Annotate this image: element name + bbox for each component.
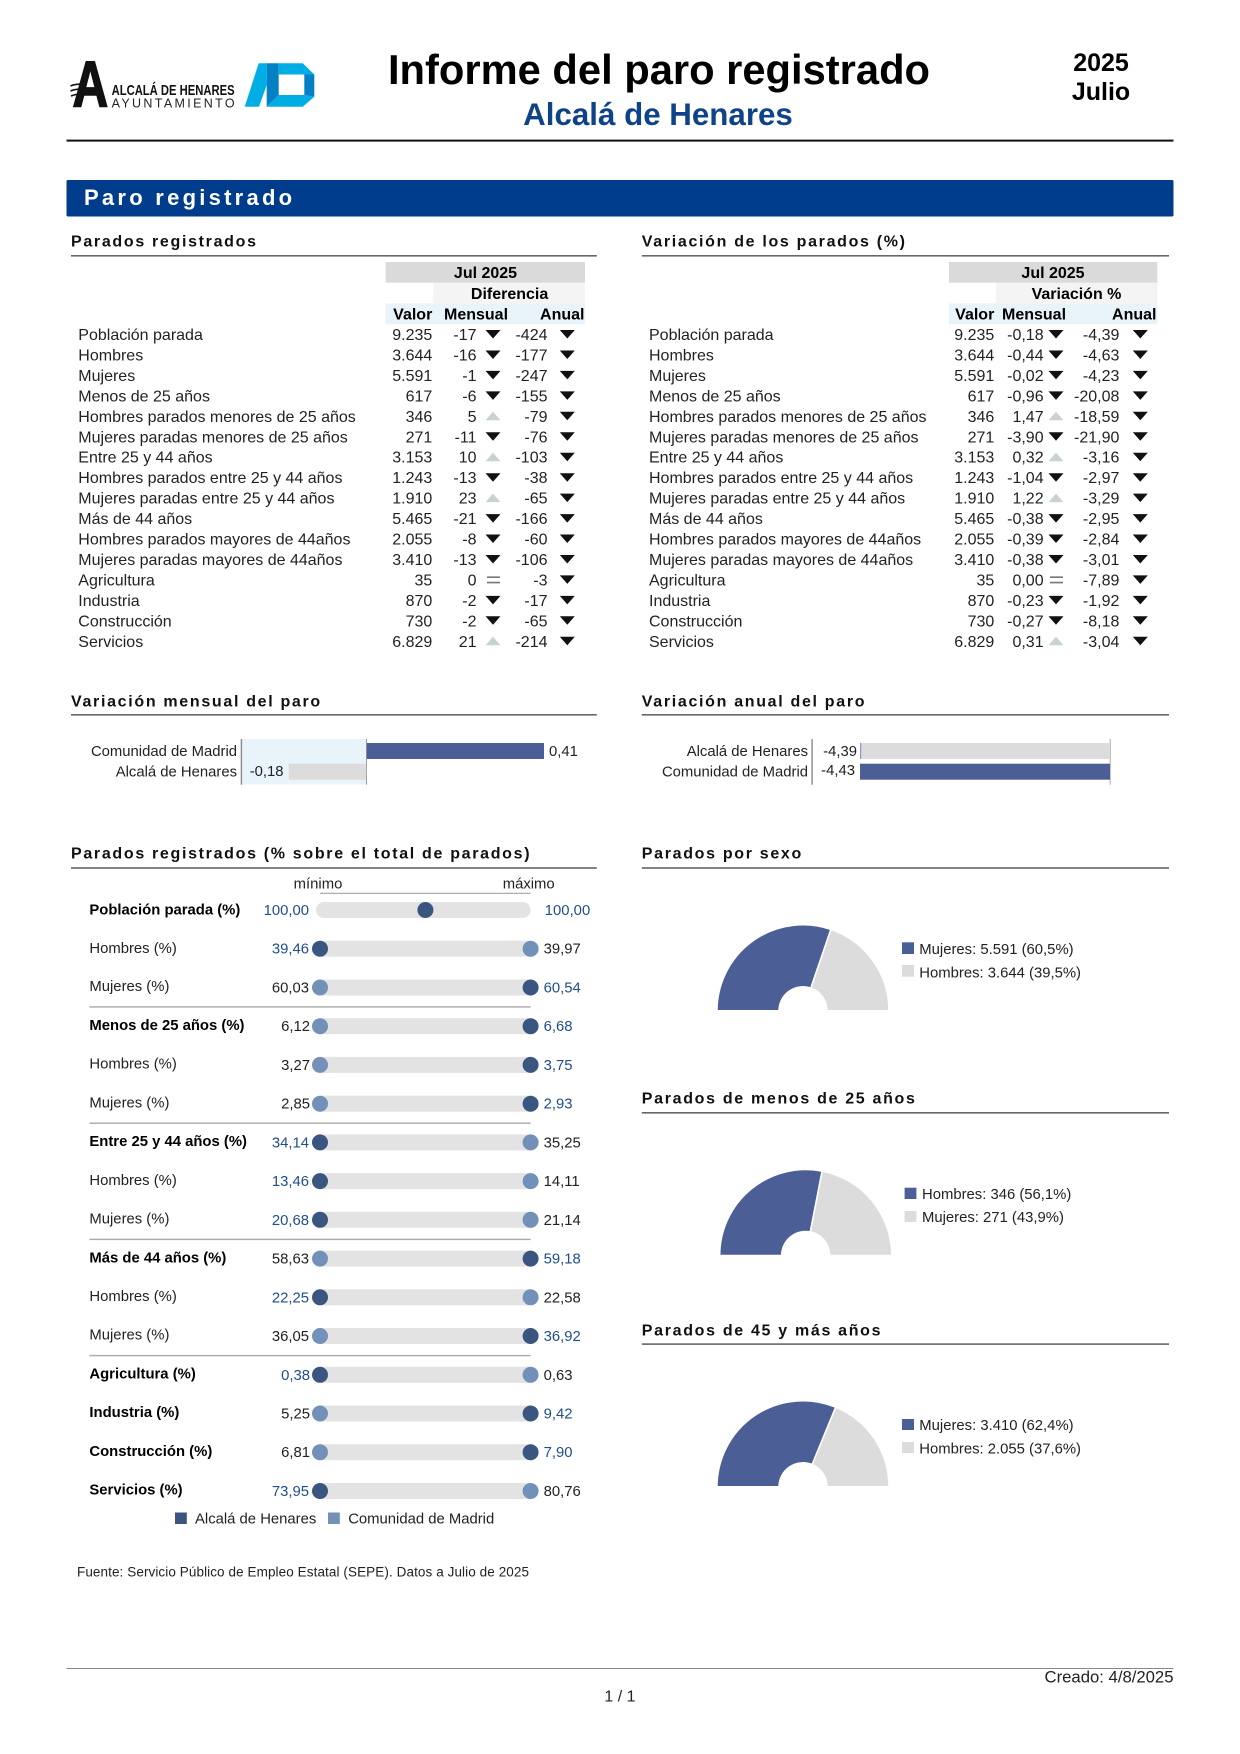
legend: Hombres: 3.644 (39,5%) xyxy=(919,965,1081,981)
logo: Alcalá de Henares Ayuntamiento: AYUNTAMIENTO xyxy=(112,96,235,110)
row: Industria: -1,92 xyxy=(1083,593,1120,610)
row: Hombres parados mayores de 44años: -2,84 xyxy=(1083,532,1120,548)
range row: Construcción (%): 7,90 xyxy=(544,1445,572,1461)
range row: Población parada (%): Población parada (%) xyxy=(89,902,240,918)
row: Industria: -0,23 xyxy=(1007,593,1044,610)
range row: Industria (%): 5,25 xyxy=(281,1406,310,1422)
range row: Servicios (%): Servicios (%) xyxy=(89,1483,183,1499)
bar chart: monthly variation: -0,18 xyxy=(250,764,284,780)
panel: Parados de menos de 25 años xyxy=(642,1091,1169,1256)
bar chart: monthly variation: 0,41 xyxy=(549,744,578,760)
row: Población parada xyxy=(649,327,1148,344)
row: Industria xyxy=(649,593,1148,610)
row: Mujeres paradas entre 25 y 44 años: 23 xyxy=(459,491,477,508)
row: Mujeres xyxy=(78,368,575,385)
row: Mujeres: -4,23 xyxy=(1083,368,1120,385)
legend: Hombres: 346 (56,1%) xyxy=(922,1187,1071,1203)
logo: Alcalá de Henares Ayuntamiento xyxy=(70,49,314,121)
range row: Mujeres (%): 60,54 xyxy=(544,980,581,996)
row: Hombres parados mayores de 44años: Hombres parados mayores de 44años xyxy=(78,532,350,548)
range row: Mujeres (%): 36,05 xyxy=(272,1329,309,1345)
table header xyxy=(386,262,585,324)
range column headers xyxy=(294,876,555,894)
row: Hombres xyxy=(649,348,1148,364)
row: Más de 44 años: Más de 44 años xyxy=(649,511,763,528)
row: Construcción: -0,27 xyxy=(1007,613,1044,630)
row: Servicios: Servicios xyxy=(78,634,143,651)
row: Entre 25 y 44 años xyxy=(649,450,1148,467)
row: Mujeres paradas entre 25 y 44 años: 1,22 xyxy=(1012,491,1044,508)
row: Hombres parados menores de 25 años: 5 xyxy=(468,409,477,426)
row: Hombres parados entre 25 y 44 años xyxy=(78,470,575,487)
range row: Mujeres (%): 20,68 xyxy=(272,1213,309,1229)
row: Menos de 25 años: -20,08 xyxy=(1074,388,1119,405)
created date: Creado: 4/8/2025 xyxy=(1045,1668,1174,1687)
row: Construcción xyxy=(78,613,575,630)
row: Mujeres paradas menores de 25 años: -76 xyxy=(524,429,548,446)
row: Construcción: 730 xyxy=(968,613,994,630)
range row: Más de 44 años (%): Más de 44 años (%) xyxy=(89,1250,226,1266)
title: Informe del paro registrado xyxy=(388,46,930,93)
row: Mujeres paradas entre 25 y 44 años: Mujeres paradas entre 25 y 44 años xyxy=(649,491,905,508)
range column headers: mínimo xyxy=(294,876,342,892)
row: Servicios: 6.829 xyxy=(392,634,432,651)
row: Hombres parados menores de 25 años: 346 xyxy=(968,409,994,426)
row: Entre 25 y 44 años: 3.153 xyxy=(392,450,432,467)
legend: Hombres: 2.055 (37,6%) xyxy=(919,1441,1081,1457)
section banner: Paro registrado: Paro registrado xyxy=(84,185,295,210)
row: Servicios: -214 xyxy=(515,634,548,651)
row: Mujeres paradas menores de 25 años: -3,90 xyxy=(1007,429,1044,446)
row: Población parada: -4,39 xyxy=(1083,327,1120,344)
row: Industria xyxy=(78,593,575,610)
range row: Mujeres (%): Mujeres (%) xyxy=(89,1212,169,1228)
table header: Variación % xyxy=(1032,286,1121,303)
row: Hombres: -0,44 xyxy=(1007,348,1044,364)
row: Hombres parados entre 25 y 44 años: -13 xyxy=(453,470,477,487)
row: Más de 44 años: 5.465 xyxy=(954,511,994,528)
row: Mujeres paradas mayores de 44años xyxy=(78,552,575,569)
row: Industria: -17 xyxy=(524,593,548,610)
logo: Alcalá de Henares Ayuntamiento: ALCALÁ DE HENARES xyxy=(112,82,235,99)
row: Más de 44 años xyxy=(649,511,1148,528)
range row: Entre 25 y 44 años (%): 34,14 xyxy=(272,1135,309,1151)
bar chart: annual variation xyxy=(662,739,1111,785)
range row: Hombres (%): Hombres (%) xyxy=(89,1173,177,1189)
range row: Entre 25 y 44 años (%): 35,25 xyxy=(544,1135,581,1151)
heading: Parados de 45 y más años xyxy=(642,1322,882,1339)
range row: Población parada (%) xyxy=(89,902,590,919)
range row: Mujeres (%): Mujeres (%) xyxy=(89,1328,169,1344)
row: Entre 25 y 44 años: 0,32 xyxy=(1012,450,1044,467)
row: Hombres parados mayores de 44años xyxy=(78,532,575,548)
range row: Menos de 25 años (%): Menos de 25 años (%) xyxy=(89,1018,245,1034)
row: Menos de 25 años: -155 xyxy=(515,388,548,405)
row: Hombres parados menores de 25 años: -18,59 xyxy=(1074,409,1119,426)
legend: Comunidad de Madrid xyxy=(348,1512,494,1528)
bar chart: monthly variation: Alcalá de Henares xyxy=(116,765,237,781)
table header: Anual xyxy=(540,306,584,324)
row: Servicios xyxy=(78,634,575,651)
row: Servicios: 21 xyxy=(459,634,477,651)
range column headers: máximo xyxy=(503,876,555,892)
range row: Entre 25 y 44 años (%) xyxy=(89,1134,581,1151)
semi-donut chart xyxy=(720,1170,892,1256)
row: Hombres parados menores de 25 años: Hombres parados menores de 25 años xyxy=(78,409,356,426)
range row: Hombres (%): 22,58 xyxy=(544,1290,581,1306)
range row: Menos de 25 años (%): 6,68 xyxy=(544,1019,572,1035)
row: Mujeres xyxy=(649,368,1148,385)
row: Industria: -2 xyxy=(462,593,477,610)
row: Construcción xyxy=(649,613,1148,630)
logo: Alcalá de Henares Ayuntamiento: A xyxy=(72,49,108,121)
row: Población parada: -0,18 xyxy=(1007,327,1044,344)
table header xyxy=(949,262,1157,324)
row: Población parada: 9.235 xyxy=(954,327,994,344)
row: Entre 25 y 44 años: Entre 25 y 44 años xyxy=(649,450,783,467)
row: Hombres parados menores de 25 años xyxy=(78,409,575,426)
range row: Hombres (%): Hombres (%) xyxy=(89,1057,177,1073)
row: Hombres parados mayores de 44años: Hombres parados mayores de 44años xyxy=(649,532,921,548)
range row: Población parada (%): 100,00 xyxy=(545,903,590,919)
range row: Hombres (%) xyxy=(89,941,581,958)
row: Menos de 25 años xyxy=(649,388,1148,405)
semi-donut chart xyxy=(717,925,889,1011)
table header: Anual xyxy=(1112,306,1156,324)
range row: Servicios (%) xyxy=(89,1483,581,1500)
row: Mujeres paradas mayores de 44años: -3,01 xyxy=(1083,552,1120,569)
legend xyxy=(175,1512,494,1528)
row: Construcción: -65 xyxy=(524,613,548,630)
row: Población parada: 9.235 xyxy=(392,327,432,344)
row: Entre 25 y 44 años: -103 xyxy=(515,450,548,467)
row: Hombres parados mayores de 44años: 2.055 xyxy=(954,532,994,548)
row: Hombres: 3.644 xyxy=(954,348,994,364)
row: Hombres parados menores de 25 años: -79 xyxy=(524,409,548,426)
row: Mujeres paradas mayores de 44años xyxy=(649,552,1148,569)
row: Más de 44 años: -2,95 xyxy=(1083,511,1120,528)
range row: Mujeres (%): 2,85 xyxy=(281,1097,310,1113)
row: Construcción: Construcción xyxy=(78,613,172,630)
footer xyxy=(66,1668,1174,1706)
row: Servicios: Servicios xyxy=(649,634,714,651)
row: Mujeres paradas menores de 25 años: Mujeres paradas menores de 25 años xyxy=(78,429,348,446)
range row: Hombres (%) xyxy=(89,1057,572,1074)
row: Mujeres paradas mayores de 44años: Mujeres paradas mayores de 44años xyxy=(649,552,913,569)
row: Servicios xyxy=(649,634,1148,651)
row: Población parada: Población parada xyxy=(649,327,774,344)
legend xyxy=(902,1418,1081,1457)
row: Hombres parados mayores de 44años: -0,39 xyxy=(1007,532,1044,548)
panel: Parados por sexo xyxy=(642,846,1169,1011)
row: Hombres: -177 xyxy=(515,348,548,364)
heading: Variación mensual del paro xyxy=(71,694,322,711)
range row: Mujeres (%) xyxy=(89,1095,572,1113)
row: Mujeres paradas menores de 25 años: 271 xyxy=(968,429,994,446)
row: Menos de 25 años: Menos de 25 años xyxy=(649,388,781,405)
legend xyxy=(902,942,1081,981)
range row: Hombres (%) xyxy=(89,1289,581,1306)
range row: Hombres (%): Hombres (%) xyxy=(89,941,177,957)
row: Agricultura: 35 xyxy=(977,572,994,589)
row: Mujeres paradas entre 25 y 44 años: -65 xyxy=(524,491,548,508)
row: Agricultura xyxy=(78,572,575,589)
row: Población parada: -424 xyxy=(515,327,548,344)
row: Entre 25 y 44 años: 3.153 xyxy=(954,450,994,467)
row: Hombres parados mayores de 44años: -60 xyxy=(524,532,548,548)
row: Hombres parados mayores de 44años: -8 xyxy=(462,532,477,548)
range row: Servicios (%): 73,95 xyxy=(272,1484,309,1500)
range row: Hombres (%): 22,25 xyxy=(272,1290,309,1306)
range row: Agricultura (%): 0,38 xyxy=(281,1368,310,1384)
legend: Mujeres: 5.591 (60,5%) xyxy=(919,942,1074,958)
range row: Hombres (%): 14,11 xyxy=(544,1174,580,1190)
range row: Hombres (%): Hombres (%) xyxy=(89,1289,177,1305)
legend xyxy=(905,1187,1071,1226)
row: Hombres parados mayores de 44años xyxy=(649,532,1148,548)
row: Mujeres paradas mayores de 44años: -106 xyxy=(515,552,548,569)
row: Entre 25 y 44 años: 10 xyxy=(459,450,477,467)
range row: Agricultura (%): 0,63 xyxy=(544,1368,572,1384)
row: Población parada: Población parada xyxy=(78,327,203,344)
row: Hombres: Hombres xyxy=(649,348,714,364)
panel: Variación de los parados table xyxy=(642,234,1169,651)
range row: Mujeres (%): Mujeres (%) xyxy=(89,979,169,995)
row: Más de 44 años: -166 xyxy=(515,511,548,528)
panel: Variación mensual del paro xyxy=(71,694,597,785)
range row: Menos de 25 años (%) xyxy=(89,1018,572,1035)
range row: Mujeres (%): 60,03 xyxy=(272,980,309,996)
range row: Más de 44 años (%) xyxy=(89,1250,581,1268)
row: Agricultura: -3 xyxy=(533,572,548,589)
row: Entre 25 y 44 años xyxy=(78,450,575,467)
row: Construcción: -8,18 xyxy=(1083,613,1120,630)
table header: Valor xyxy=(393,306,432,324)
heading: Variación de los parados (%) xyxy=(642,234,907,251)
row: Mujeres paradas menores de 25 años xyxy=(649,429,1148,446)
bar chart: annual variation: Comunidad de Madrid xyxy=(662,765,808,781)
subtitle: Alcalá de Henares xyxy=(523,97,793,132)
panel: Parados de 45 y más años xyxy=(642,1322,1169,1487)
row: Hombres parados menores de 25 años: 1,47 xyxy=(1012,409,1044,426)
row: Servicios: -3,04 xyxy=(1083,634,1120,651)
range row: Mujeres (%) xyxy=(89,1212,581,1229)
range row: Mujeres (%): Mujeres (%) xyxy=(89,1095,169,1111)
range row: Agricultura (%) xyxy=(89,1366,572,1384)
range row: Mujeres (%): 36,92 xyxy=(544,1329,581,1345)
table header: Jul 2025 xyxy=(1021,265,1085,282)
row: Más de 44 años: Más de 44 años xyxy=(78,511,192,528)
range row: Industria (%): 9,42 xyxy=(544,1406,572,1422)
range row: Hombres (%): 39,46 xyxy=(272,942,309,958)
range row: Población parada (%): 100,00 xyxy=(264,903,309,919)
row: Mujeres: -0,02 xyxy=(1007,368,1044,385)
row: Mujeres paradas entre 25 y 44 años: 1.910 xyxy=(954,491,994,508)
source note: Fuente: Servicio Público de Empleo Estatal (SEPE). Datos a Julio de 2025 xyxy=(77,1564,529,1579)
range row: Más de 44 años (%): 58,63 xyxy=(272,1252,309,1268)
range row: Industria (%): Industria (%) xyxy=(89,1405,179,1421)
row: Mujeres paradas menores de 25 años: -11 xyxy=(455,429,477,446)
row: Construcción: Construcción xyxy=(649,613,742,630)
row: Hombres: Hombres xyxy=(78,348,143,364)
row: Más de 44 años xyxy=(78,511,575,528)
range row: Entre 25 y 44 años (%): Entre 25 y 44 años (%) xyxy=(89,1134,247,1150)
row: Hombres parados entre 25 y 44 años xyxy=(649,470,1148,487)
bar chart: annual variation: -4,39 xyxy=(823,744,857,760)
row: Menos de 25 años: -6 xyxy=(462,388,477,405)
row: Mujeres paradas menores de 25 años xyxy=(78,429,575,446)
row: Hombres parados menores de 25 años: 346 xyxy=(406,409,432,426)
range row: Construcción (%): 6,81 xyxy=(281,1445,310,1461)
range row: Construcción (%): Construcción (%) xyxy=(89,1444,212,1460)
heading: Variación anual del paro xyxy=(642,694,866,711)
header xyxy=(66,46,1174,142)
row: Hombres parados entre 25 y 44 años: -38 xyxy=(524,470,548,487)
row: Hombres parados menores de 25 años: Hombres parados menores de 25 años xyxy=(649,409,926,426)
range row: Mujeres (%): 2,93 xyxy=(544,1097,572,1113)
row: Mujeres: 5.591 xyxy=(954,368,994,385)
row: Hombres parados entre 25 y 44 años: 1.243 xyxy=(392,470,432,487)
row: Más de 44 años: -0,38 xyxy=(1007,511,1044,528)
row: Hombres parados entre 25 y 44 años: -1,04 xyxy=(1007,470,1044,487)
row: Agricultura: -7,89 xyxy=(1083,572,1120,589)
row: Hombres: -4,63 xyxy=(1083,348,1120,364)
row: Hombres parados entre 25 y 44 años: -2,97 xyxy=(1083,470,1120,487)
row: Menos de 25 años xyxy=(78,388,575,405)
row: Agricultura xyxy=(649,572,1148,589)
range row: Agricultura (%): Agricultura (%) xyxy=(89,1367,196,1383)
page number: 1 / 1 xyxy=(604,1689,636,1706)
range row: Hombres (%): 13,46 xyxy=(272,1174,309,1190)
row: Hombres parados entre 25 y 44 años: 1.243 xyxy=(954,470,994,487)
row: Más de 44 años: -21 xyxy=(453,511,477,528)
row: Menos de 25 años: 617 xyxy=(406,388,432,405)
row: Industria: Industria xyxy=(78,593,140,610)
table header: Mensual xyxy=(444,306,508,324)
bar chart: monthly variation: Comunidad de Madrid xyxy=(91,744,237,760)
row: Mujeres paradas menores de 25 años: -21,90 xyxy=(1074,429,1119,446)
range row: Menos de 25 años (%): 6,12 xyxy=(281,1019,310,1035)
heading: Parados registrados xyxy=(71,234,258,251)
section banner: Paro registrado xyxy=(66,180,1174,216)
row: Mujeres paradas entre 25 y 44 años: Mujeres paradas entre 25 y 44 años xyxy=(78,491,334,508)
table header: Jul 2025 xyxy=(454,265,517,282)
row: Más de 44 años: 5.465 xyxy=(392,511,432,528)
range row: Mujeres (%): 21,14 xyxy=(544,1213,581,1229)
range row: Construcción (%) xyxy=(89,1444,572,1461)
heading: Parados por sexo xyxy=(642,846,803,863)
row: Hombres parados menores de 25 años xyxy=(649,409,1148,426)
row: Mujeres paradas mayores de 44años: -13 xyxy=(453,552,477,569)
range row: Servicios (%): 80,76 xyxy=(544,1484,581,1500)
row: Construcción: 730 xyxy=(406,613,432,630)
month: Julio xyxy=(1072,78,1130,106)
range row: Más de 44 años (%): 59,18 xyxy=(544,1252,581,1268)
row: Mujeres paradas entre 25 y 44 años xyxy=(649,491,1148,508)
row: Mujeres paradas mayores de 44años: Mujeres paradas mayores de 44años xyxy=(78,552,342,569)
row: Agricultura: 35 xyxy=(415,572,432,589)
table header: Valor xyxy=(955,306,994,324)
row: Servicios: 6.829 xyxy=(954,634,994,651)
row: Menos de 25 años: -0,96 xyxy=(1007,388,1044,405)
heading: Parados de menos de 25 años xyxy=(642,1091,917,1108)
row: Industria: 870 xyxy=(968,593,994,610)
row: Mujeres paradas entre 25 y 44 años xyxy=(78,491,575,508)
legend: Alcalá de Henares xyxy=(195,1512,316,1528)
range row: Hombres (%): 3,27 xyxy=(281,1058,310,1074)
row: Hombres parados entre 25 y 44 años: Hombres parados entre 25 y 44 años xyxy=(78,470,342,487)
range row: Industria (%) xyxy=(89,1405,572,1422)
row: Mujeres paradas menores de 25 años: 271 xyxy=(406,429,432,446)
row: Mujeres paradas menores de 25 años: Mujeres paradas menores de 25 años xyxy=(649,429,918,446)
row: Mujeres paradas mayores de 44años: 3.410 xyxy=(954,552,994,569)
row: Mujeres paradas mayores de 44años: 3.410 xyxy=(392,552,432,569)
row: Hombres parados entre 25 y 44 años: Hombres parados entre 25 y 44 años xyxy=(649,470,913,487)
range row: Mujeres (%) xyxy=(89,979,581,996)
row: Hombres xyxy=(78,348,575,364)
row: Menos de 25 años: Menos de 25 años xyxy=(78,388,210,405)
row: Población parada: -17 xyxy=(453,327,477,344)
row: Construcción: -2 xyxy=(462,613,477,630)
row: Entre 25 y 44 años: -3,16 xyxy=(1083,450,1120,467)
range row: Hombres (%): 3,75 xyxy=(544,1058,572,1074)
heading: Parados registrados (% sobre el total de parados) xyxy=(71,846,531,863)
range row: Hombres (%) xyxy=(89,1173,580,1190)
bar chart: monthly variation xyxy=(91,739,578,785)
row: Agricultura: 0,00 xyxy=(1012,572,1044,589)
row: Industria: 870 xyxy=(406,593,432,610)
row: Entre 25 y 44 años: Entre 25 y 44 años xyxy=(78,450,213,467)
table header: Mensual xyxy=(1002,306,1066,324)
row: Mujeres paradas entre 25 y 44 años: 1.910 xyxy=(392,491,432,508)
row: Mujeres: Mujeres xyxy=(649,368,706,385)
bar chart: annual variation: Alcalá de Henares xyxy=(687,744,808,760)
semi-donut chart xyxy=(717,1401,889,1487)
panel: Variación anual del paro xyxy=(642,694,1169,785)
range row: Mujeres (%) xyxy=(89,1328,581,1345)
row: Hombres parados mayores de 44años: 2.055 xyxy=(392,532,432,548)
year: 2025 xyxy=(1073,49,1129,77)
legend: Mujeres: 3.410 (62,4%) xyxy=(919,1418,1074,1434)
row: Población parada xyxy=(78,327,575,344)
row: Mujeres paradas entre 25 y 44 años: -3,29 xyxy=(1083,491,1120,508)
row: Menos de 25 años: 617 xyxy=(968,388,994,405)
row: Agricultura: Agricultura xyxy=(78,572,155,589)
row: Servicios: 0,31 xyxy=(1012,634,1044,651)
panel: Parados registrados (% sobre el total de parados) xyxy=(71,846,597,1528)
panel: Parados registrados table xyxy=(71,234,597,651)
row: Industria: Industria xyxy=(649,593,710,610)
row: Mujeres: 5.591 xyxy=(392,368,432,385)
row: Hombres: 3.644 xyxy=(392,348,432,364)
bar chart: annual variation: -4,43 xyxy=(821,763,855,779)
row: Agricultura: Agricultura xyxy=(649,572,726,589)
legend: Mujeres: 271 (43,9%) xyxy=(922,1210,1064,1226)
row: Mujeres: -247 xyxy=(515,368,548,385)
row: Mujeres: -1 xyxy=(462,368,477,385)
row: Mujeres paradas mayores de 44años: -0,38 xyxy=(1007,552,1044,569)
row: Agricultura: 0 xyxy=(468,572,477,589)
range row: Hombres (%): 39,97 xyxy=(544,942,581,958)
table header: Diferencia xyxy=(471,286,548,303)
row: Hombres: -16 xyxy=(453,348,477,364)
row: Mujeres: Mujeres xyxy=(78,368,135,385)
